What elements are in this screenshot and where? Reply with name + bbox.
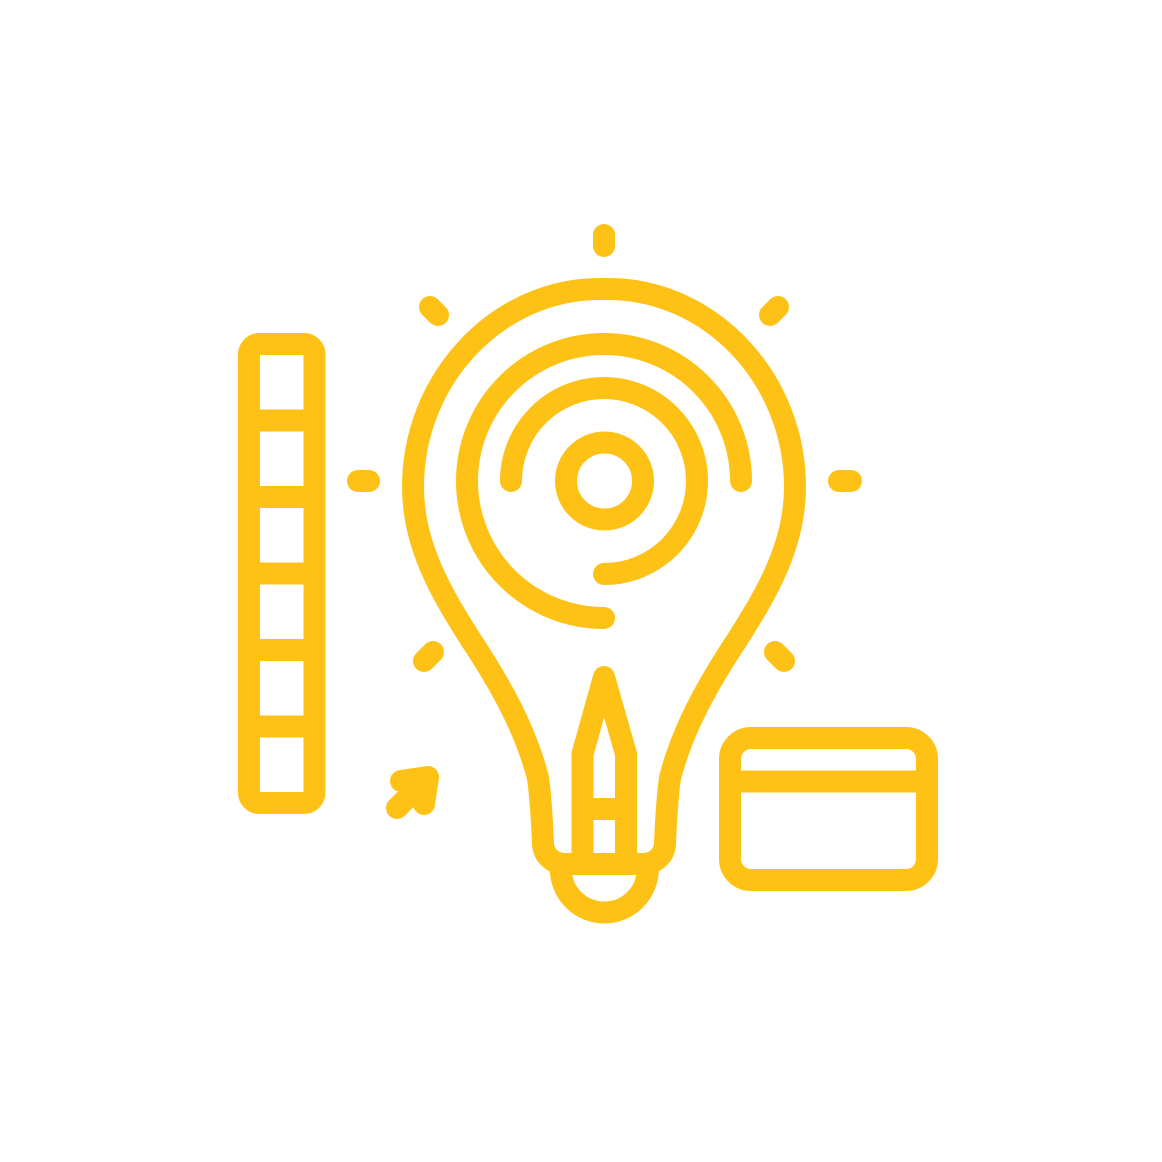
icon: light rays <box>358 235 851 661</box>
icon: outer spiral arc <box>467 344 741 618</box>
icon: lightbulb outline <box>413 289 795 864</box>
icon: center circle <box>566 442 643 520</box>
icon: cursor arrow <box>397 777 428 808</box>
icon: card window <box>730 738 927 880</box>
icon: bulb base cap <box>561 869 648 912</box>
icon: ruler <box>249 344 314 803</box>
icon: pencil <box>582 677 626 864</box>
icon: inner spiral arc <box>511 388 697 574</box>
